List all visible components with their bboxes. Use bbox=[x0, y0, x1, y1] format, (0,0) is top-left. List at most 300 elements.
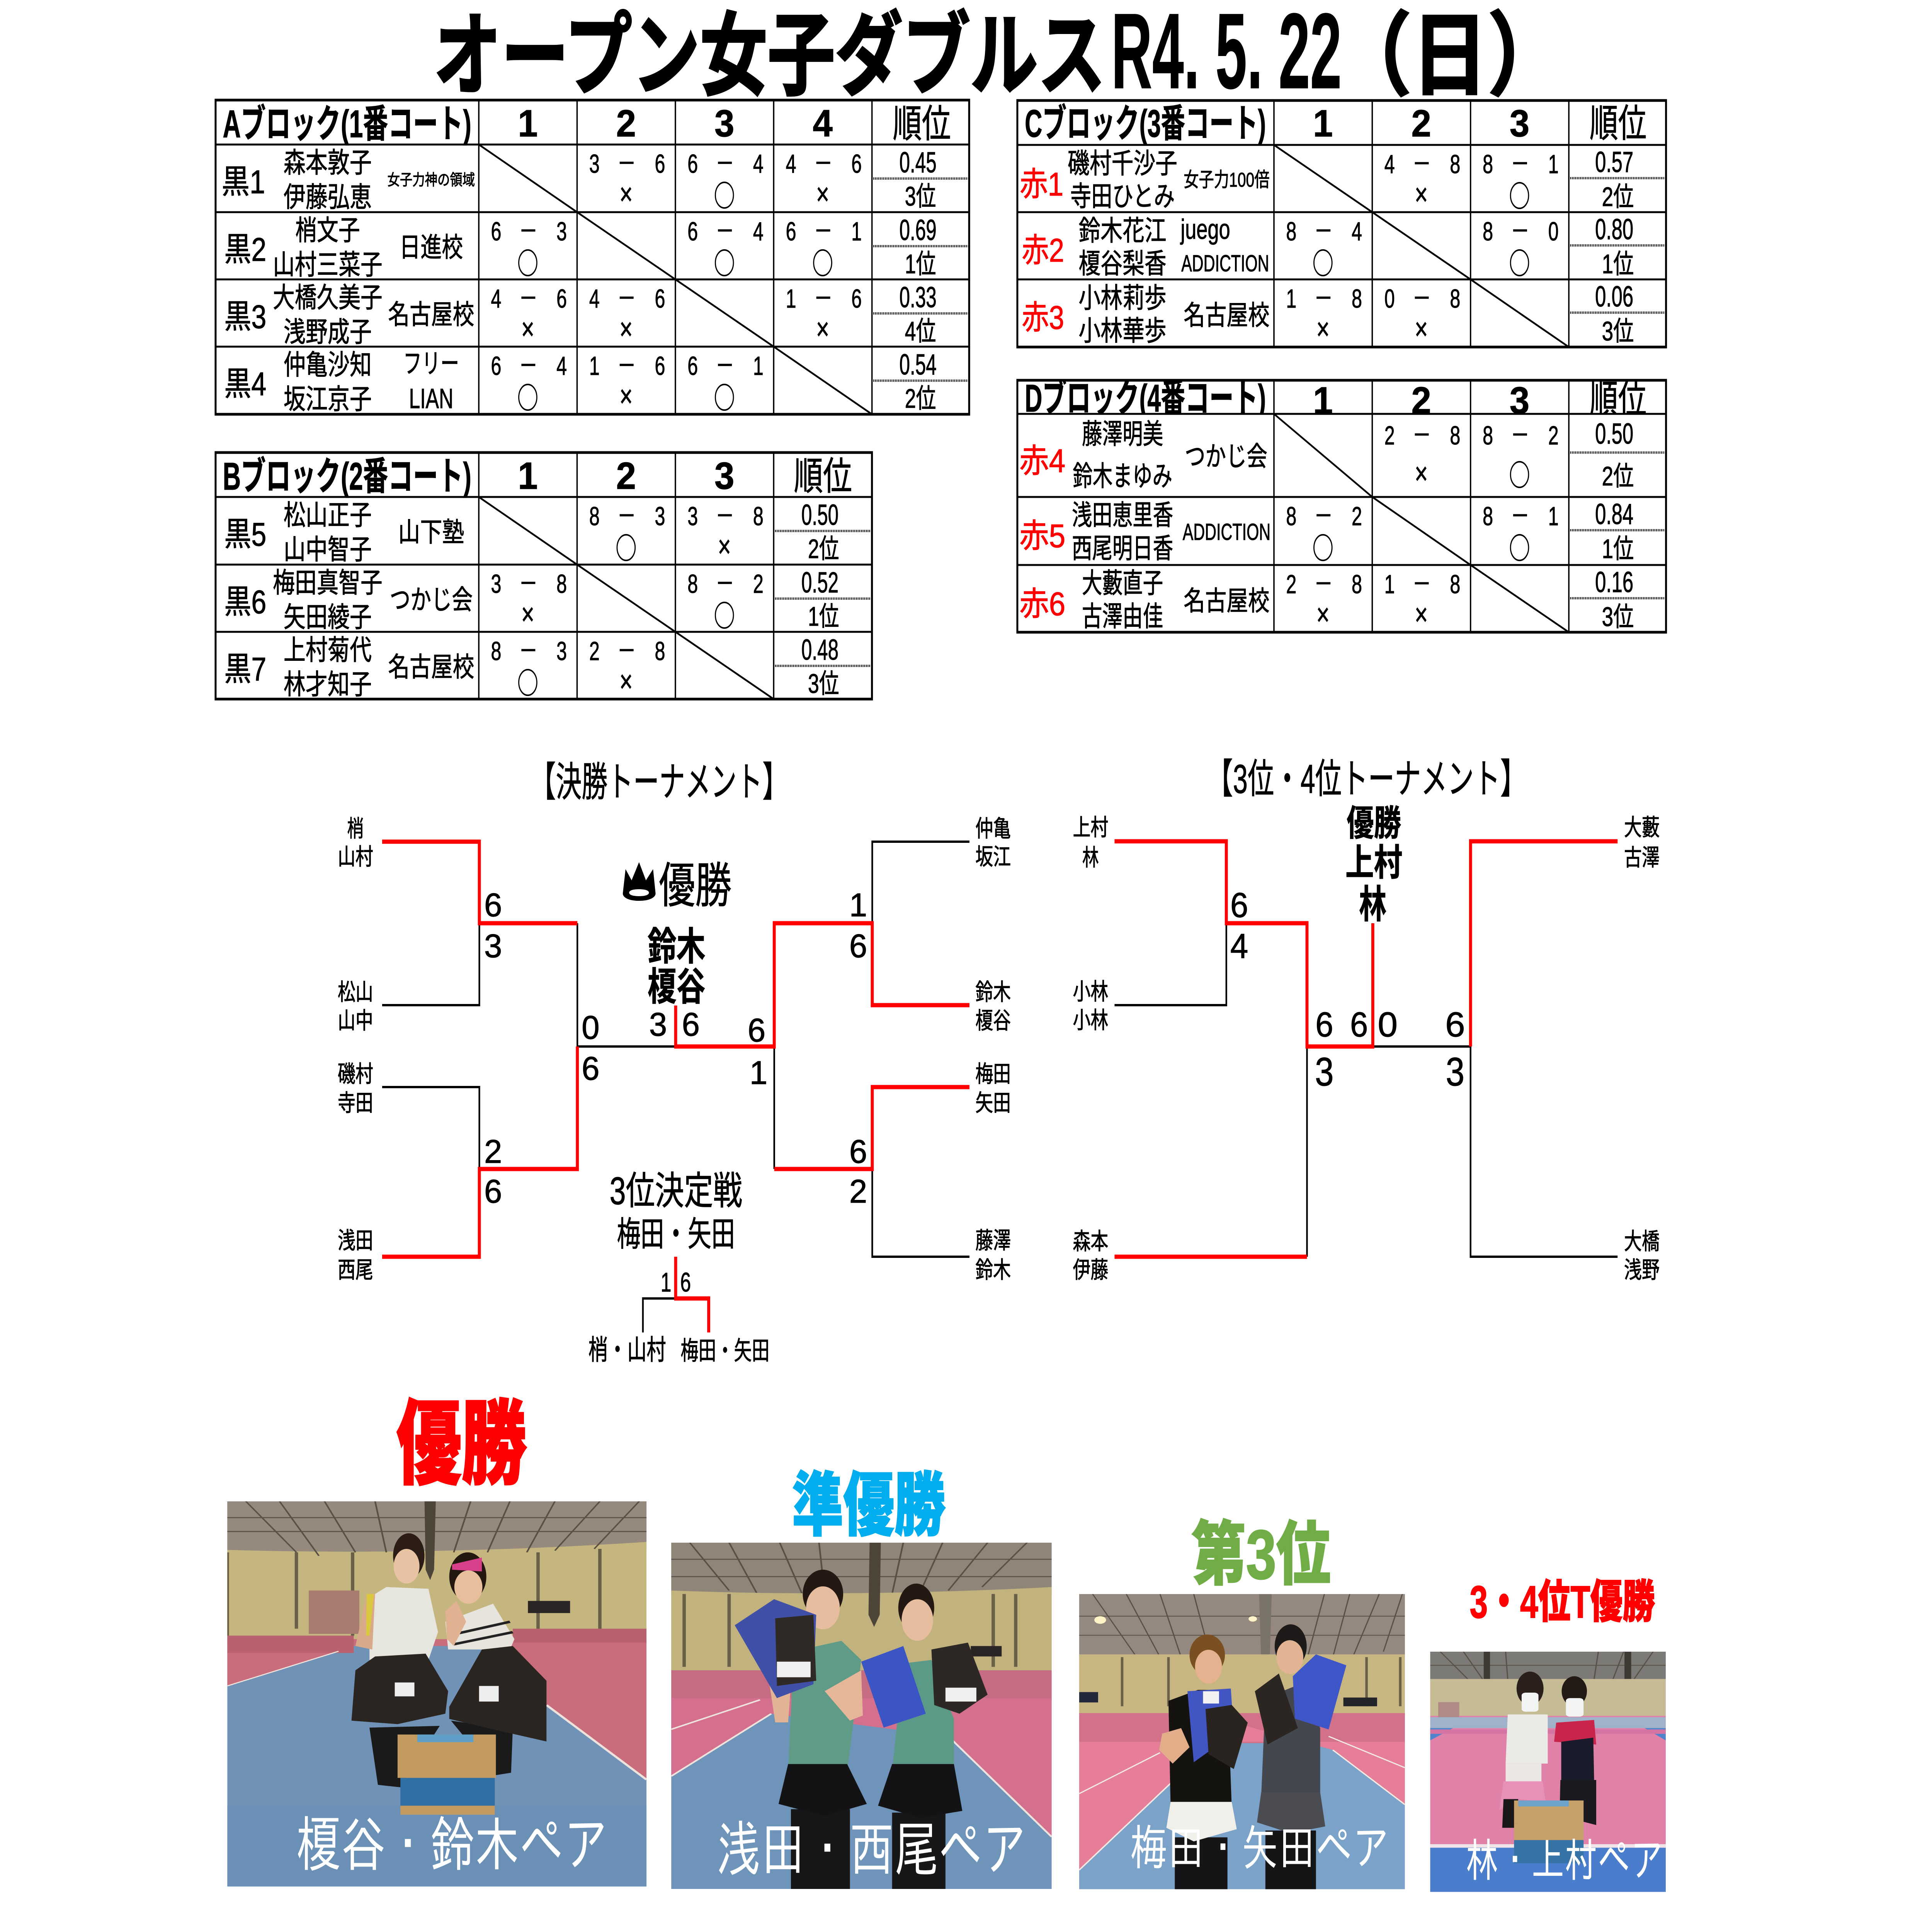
row: 黒6: 3 bbox=[491, 569, 502, 599]
third place match scores and teams: 1 bbox=[661, 1267, 672, 1297]
panel: final tournament bracket bbox=[338, 760, 1011, 1366]
row: 赤3: × bbox=[1316, 311, 1330, 347]
row: 赤4: ○ bbox=[1509, 452, 1530, 495]
bracket scores: 3rd/4th: 3 bbox=[1446, 1050, 1464, 1094]
row: 黒2: 0.69 bbox=[900, 214, 937, 246]
player names: right side: 大橋 bbox=[1624, 1229, 1660, 1255]
row: 黒3: － bbox=[617, 284, 636, 313]
row: 赤4: 鈴木まゆみ bbox=[1073, 461, 1172, 492]
row: 黒1 bbox=[222, 146, 968, 215]
row: 赤3: 1 bbox=[1286, 284, 1296, 313]
player names: right side: 坂江 bbox=[975, 844, 1011, 870]
row: 赤5: 赤5 bbox=[1019, 517, 1065, 554]
row: 赤6 bbox=[1019, 566, 1665, 632]
row: 赤2: 0.80 bbox=[1595, 213, 1633, 245]
bracket scores: 3rd/4th: 6 bbox=[1350, 1005, 1368, 1044]
block D header: 順位 bbox=[1590, 378, 1646, 421]
row: 赤4: 2 bbox=[1548, 421, 1559, 450]
row: 黒4: 2位 bbox=[905, 383, 936, 413]
row: 黒4: 仲亀沙知 bbox=[284, 350, 372, 381]
row: 赤3: － bbox=[1412, 284, 1431, 313]
row: 黒1: 6 bbox=[687, 149, 698, 179]
row: 赤5: 0.84 bbox=[1595, 498, 1633, 530]
row: 黒2: 日進校 bbox=[400, 232, 463, 262]
panel: 3rd/4th place tournament bracket bbox=[1073, 757, 1660, 1283]
row: 黒1: － bbox=[814, 149, 833, 179]
bracket scores: final: 2 bbox=[484, 1133, 502, 1170]
row: 黒4: 1 bbox=[753, 351, 764, 381]
row: 赤6: × bbox=[1415, 597, 1428, 632]
row: 黒2: ○ bbox=[517, 240, 538, 283]
block A header: Aブロック(1番コート) bbox=[223, 102, 471, 146]
champion label and names: 林 bbox=[1359, 883, 1386, 926]
row: 黒3: 4 bbox=[491, 284, 502, 313]
player names: right side: 鈴木 bbox=[975, 1257, 1011, 1283]
player names: left side: 森本 bbox=[1073, 1229, 1108, 1255]
row: 黒4: 4 bbox=[556, 351, 567, 381]
row: 黒1: 6 bbox=[851, 149, 862, 179]
player names: right side bbox=[1624, 815, 1660, 1283]
row: 黒5: × bbox=[718, 529, 731, 564]
row: 赤6: 古澤由佳 bbox=[1082, 601, 1163, 632]
row: 黒1: 3 bbox=[589, 149, 600, 179]
row: 黒5: 2位 bbox=[808, 534, 839, 564]
row: 黒2: 4 bbox=[753, 217, 764, 246]
row: 赤6: × bbox=[1316, 597, 1330, 632]
row: 赤1: 8 bbox=[1450, 150, 1460, 179]
row: 黒1: × bbox=[619, 177, 633, 212]
row: 黒3: 大橋久美子 bbox=[273, 282, 383, 313]
row: 赤6: 赤6 bbox=[1019, 585, 1065, 622]
row: 赤1: × bbox=[1415, 177, 1428, 212]
bracket scores: 3rd/4th: 6 bbox=[1230, 885, 1248, 925]
bracket scores: 3rd/4th: 6 bbox=[1445, 1005, 1465, 1044]
row: 黒5: － bbox=[617, 502, 636, 531]
bracket scores: final: 6 bbox=[682, 1006, 700, 1043]
row: 黒2 bbox=[224, 214, 968, 283]
block B header: 3 bbox=[714, 455, 734, 497]
row: 黒6: つかじ会 bbox=[390, 585, 473, 615]
row: 赤2: 8 bbox=[1483, 217, 1493, 246]
row: 黒1: 4 bbox=[753, 149, 764, 179]
row: 黒2: ○ bbox=[714, 240, 735, 283]
row: 黒1: 女子力神の領域 bbox=[388, 171, 475, 189]
block B header: 順位 bbox=[794, 455, 852, 498]
row: 赤3: 小林華歩 bbox=[1078, 316, 1167, 347]
row: 黒3: － bbox=[814, 284, 833, 313]
row: 赤4: － bbox=[1412, 421, 1431, 450]
block B header: 1 bbox=[518, 455, 538, 497]
row: 赤6: 8 bbox=[1352, 570, 1362, 599]
player names: left side: 松山 bbox=[338, 980, 373, 1006]
player names: left side bbox=[338, 816, 373, 1283]
row: 黒4: 6 bbox=[687, 351, 698, 381]
title: （日） bbox=[1336, 5, 1564, 107]
heading: winner: 優勝 bbox=[396, 1393, 527, 1496]
player names: right side: 矢田 bbox=[975, 1091, 1011, 1116]
row: 黒2: 1 bbox=[851, 217, 862, 246]
row: 黒4: ○ bbox=[714, 374, 735, 417]
block C header: Cブロック(3番コート) bbox=[1025, 102, 1266, 145]
row: 赤2: juego bbox=[1180, 214, 1230, 245]
row: 黒5: 松山正子 bbox=[284, 500, 372, 531]
row: 赤1: 磯村千沙子 bbox=[1068, 148, 1177, 179]
champion names: 鈴木 bbox=[648, 925, 706, 968]
row: 赤3: 小林莉歩 bbox=[1078, 283, 1167, 314]
row: 黒3: 名古屋校 bbox=[388, 299, 474, 330]
block D header: 2 bbox=[1412, 379, 1431, 422]
row: 赤4: つかじ会 bbox=[1185, 441, 1267, 471]
row: 黒6: 0.52 bbox=[801, 566, 838, 599]
row: 赤1: － bbox=[1412, 150, 1431, 179]
row: 黒1: 3位 bbox=[905, 181, 936, 211]
row: 黒4: － bbox=[617, 351, 636, 381]
heading: 3rd/4th tournament winner: 3・4位T優勝 bbox=[1470, 1576, 1655, 1627]
row: 黒1: 森本敦子 bbox=[284, 148, 372, 179]
player names: left side: 林 bbox=[1082, 845, 1099, 871]
block A header: 4 bbox=[813, 102, 833, 145]
row: 黒5: 8 bbox=[753, 502, 764, 531]
row: 黒7: 8 bbox=[655, 636, 665, 666]
row: 黒5: 3 bbox=[655, 502, 665, 531]
row: 黒1: － bbox=[716, 149, 734, 179]
player names: right side: 藤澤 bbox=[975, 1228, 1011, 1254]
row: 赤2: － bbox=[1511, 217, 1529, 246]
row: 赤2 bbox=[1022, 213, 1665, 283]
row: 赤3: 0 bbox=[1384, 284, 1395, 313]
champion label and names: 上村 bbox=[1345, 842, 1402, 883]
block B header bbox=[223, 455, 852, 498]
bracket scores: final: 1 bbox=[750, 1054, 767, 1091]
player names: right side: 梅田 bbox=[975, 1062, 1011, 1087]
row: 赤4: 2位 bbox=[1602, 461, 1634, 491]
row: 赤6: － bbox=[1412, 570, 1431, 599]
champion label and names bbox=[1345, 803, 1402, 926]
row: 赤3 bbox=[1022, 280, 1665, 347]
row: 黒7: 3 bbox=[556, 636, 567, 666]
bracket scores: final: 6 bbox=[582, 1050, 600, 1087]
row: 黒6: － bbox=[519, 569, 538, 599]
photo panel: 3rd/4th tournament winners bbox=[1430, 1652, 1666, 1892]
block D header: 1 bbox=[1313, 379, 1333, 422]
row: 赤3: × bbox=[1415, 311, 1428, 347]
row: 黒5: 0.50 bbox=[801, 499, 838, 531]
row: 黒6 bbox=[224, 566, 871, 635]
row: 黒5: ○ bbox=[616, 525, 636, 568]
row: 黒4: 1 bbox=[589, 351, 600, 381]
bracket lines: 3rd/4th bbox=[1114, 841, 1617, 1257]
row: 黒6: 黒6 bbox=[224, 584, 266, 620]
player names: right side: 大藪 bbox=[1624, 815, 1660, 841]
caption: 3rd/4th tournament winners: 林・上村ペア bbox=[1466, 1836, 1663, 1882]
heading: runner-up: 準優勝 bbox=[792, 1467, 946, 1545]
row: 赤1: 2位 bbox=[1602, 182, 1634, 212]
row: 黒7: 0.48 bbox=[801, 633, 838, 666]
row: 黒5 bbox=[224, 499, 871, 568]
bracket scores: final bbox=[484, 887, 867, 1210]
block C header: 2 bbox=[1412, 102, 1431, 145]
row: 黒1: ○ bbox=[714, 172, 735, 215]
player names: left side: 梢 bbox=[347, 816, 364, 842]
row: 黒4: フリー bbox=[403, 349, 459, 379]
row: 赤6: 名古屋校 bbox=[1184, 586, 1270, 616]
row: 赤1: 1 bbox=[1548, 150, 1559, 179]
player names: right side: 榎谷 bbox=[975, 1008, 1011, 1034]
bracket scores: final: 6 bbox=[484, 1173, 502, 1210]
row: 赤3: 0.06 bbox=[1595, 280, 1633, 313]
block D header: Dブロック(4番コート) bbox=[1025, 377, 1266, 420]
row: 黒3: × bbox=[816, 311, 829, 347]
row: 赤4 bbox=[1019, 417, 1665, 495]
row: 赤2: ADDICTION bbox=[1181, 251, 1269, 277]
row: 黒6: － bbox=[716, 569, 734, 599]
row: 赤5: 1位 bbox=[1602, 534, 1634, 564]
panel: block C table bbox=[1017, 100, 1666, 347]
row: 赤4: 0.50 bbox=[1595, 417, 1633, 450]
bracket scores: final: 3 bbox=[649, 1006, 667, 1043]
row: 赤1: 0.57 bbox=[1595, 146, 1633, 178]
row: 黒3: × bbox=[619, 311, 633, 347]
player names: right side: 古澤 bbox=[1624, 845, 1660, 871]
row: 黒6: 矢田綾子 bbox=[284, 602, 372, 633]
row: 黒3: 6 bbox=[851, 284, 862, 313]
block B header: Bブロック(2番コート) bbox=[223, 455, 471, 498]
row: 赤5: ○ bbox=[1313, 525, 1333, 568]
row: 黒7: － bbox=[519, 636, 538, 666]
player names: left side: 山村 bbox=[338, 844, 373, 870]
row: 黒7: 名古屋校 bbox=[388, 652, 474, 682]
bracket scores: final: 6 bbox=[484, 887, 502, 923]
player names: left side: 伊藤 bbox=[1073, 1257, 1108, 1283]
row: 黒2: 3 bbox=[556, 217, 567, 246]
row: 赤4: 8 bbox=[1450, 421, 1460, 450]
third place match label: 梅田・矢田 bbox=[617, 1216, 735, 1254]
row: 赤2: － bbox=[1314, 217, 1333, 246]
row: 黒3 bbox=[224, 281, 968, 348]
row: 黒4: － bbox=[519, 351, 538, 381]
caption: runners-up: 浅田・西尾ペア bbox=[716, 1818, 1027, 1878]
bracket scores: final: 6 bbox=[748, 1012, 765, 1048]
row: 黒1: × bbox=[816, 177, 829, 212]
block C header: 3 bbox=[1510, 102, 1529, 145]
row: 黒6: ○ bbox=[714, 592, 735, 635]
row: 黒4: × bbox=[619, 379, 633, 414]
panel: block B table bbox=[216, 453, 872, 703]
bracket scores: 3rd/4th: 6 bbox=[1315, 1005, 1333, 1044]
third place match scores and teams bbox=[588, 1267, 770, 1366]
row: 黒1: 伊藤弘恵 bbox=[284, 182, 372, 213]
row: 赤3: 名古屋校 bbox=[1184, 300, 1270, 330]
bracket scores: final: 6 bbox=[849, 927, 867, 964]
bracket scores: 3rd/4th: 4 bbox=[1230, 926, 1248, 966]
player names: left side: 西尾 bbox=[338, 1257, 373, 1283]
row: 黒1: 4 bbox=[786, 149, 796, 179]
row: 黒4 bbox=[224, 348, 968, 417]
row: 黒7: 8 bbox=[491, 636, 502, 666]
player names: left side bbox=[1073, 815, 1108, 1283]
row: 黒4: LIAN bbox=[409, 383, 453, 414]
block A header: 2 bbox=[616, 102, 636, 145]
row: 黒2: 6 bbox=[687, 217, 698, 246]
row: 黒2: 山村三菜子 bbox=[273, 250, 383, 281]
row: 黒1: 黒1 bbox=[222, 163, 265, 200]
row: 黒4: － bbox=[716, 351, 734, 381]
row: 黒4: 黒4 bbox=[224, 366, 266, 402]
row: 黒7: × bbox=[619, 664, 633, 699]
row: 赤3: － bbox=[1314, 284, 1333, 313]
block D header bbox=[1025, 377, 1646, 422]
row: 赤5: 西尾明日香 bbox=[1072, 533, 1173, 564]
row: 赤5: 浅田恵里香 bbox=[1072, 500, 1173, 531]
photo panel: winners bbox=[227, 1501, 646, 1887]
block A header: 3 bbox=[714, 102, 734, 145]
third place match label bbox=[610, 1169, 742, 1254]
icon: crown bbox=[623, 862, 656, 901]
row: 黒5: 山中智子 bbox=[284, 534, 372, 565]
row: 黒6: 梅田真智子 bbox=[273, 568, 383, 599]
row: 赤3: 3位 bbox=[1602, 316, 1634, 346]
block A header: 1 bbox=[518, 102, 538, 145]
champion label: 優勝 bbox=[659, 859, 731, 912]
row: 赤5: － bbox=[1314, 502, 1333, 531]
row: 黒2: － bbox=[716, 217, 734, 246]
third place match label: 3位決定戦 bbox=[610, 1169, 742, 1213]
bracket scores: 3rd/4th: 0 bbox=[1378, 1005, 1398, 1044]
row: 赤5: ○ bbox=[1509, 525, 1530, 568]
row: 赤4: 赤4 bbox=[1019, 442, 1065, 479]
row: 黒2: 梢文子 bbox=[295, 215, 360, 246]
panel: block A table bbox=[216, 100, 969, 417]
row: 黒4: 6 bbox=[655, 351, 665, 381]
row: 黒2: ○ bbox=[812, 240, 833, 283]
block D header: 3 bbox=[1510, 379, 1529, 422]
row: 黒2: 黒2 bbox=[224, 231, 266, 268]
bracket lines: final bbox=[382, 842, 969, 1332]
row: 赤4: － bbox=[1511, 421, 1529, 450]
row: 赤2: 0 bbox=[1548, 217, 1559, 246]
row: 黒5: 黒5 bbox=[224, 516, 266, 553]
row: 黒4: 6 bbox=[491, 351, 502, 381]
row: 赤2: 鈴木花江 bbox=[1078, 216, 1167, 247]
row: 黒6: 1位 bbox=[808, 601, 839, 631]
champion names bbox=[648, 925, 706, 1009]
row: 赤3: 赤3 bbox=[1022, 299, 1064, 336]
bracket scores: final: 3 bbox=[484, 927, 502, 964]
row: 赤2: 4 bbox=[1352, 217, 1362, 246]
row: 赤1: 赤1 bbox=[1020, 166, 1063, 202]
row: 赤5: ADDICTION bbox=[1183, 519, 1270, 545]
row: 赤1: 4 bbox=[1384, 150, 1395, 179]
player names: right side: 鈴木 bbox=[975, 980, 1011, 1006]
row: 黒5: 8 bbox=[589, 502, 600, 531]
row: 赤5: 8 bbox=[1483, 502, 1493, 531]
bracket scores: final: 6 bbox=[849, 1133, 867, 1170]
row: 黒7: ○ bbox=[517, 660, 538, 703]
champion label and names: 優勝 bbox=[1347, 803, 1401, 843]
row: 黒2: 1位 bbox=[905, 249, 936, 279]
row: 赤6: 2 bbox=[1286, 570, 1296, 599]
player names: left side: 小林 bbox=[1073, 1008, 1108, 1034]
row: 赤2: ○ bbox=[1509, 240, 1530, 283]
bracket scores: 3rd/4th bbox=[1230, 885, 1465, 1094]
third place match scores and teams: 6 bbox=[680, 1267, 691, 1297]
row: 赤5: － bbox=[1511, 502, 1529, 531]
row: 赤1: 女子力100倍 bbox=[1184, 168, 1270, 191]
row: 赤4: 2 bbox=[1384, 421, 1395, 450]
champion names: 榎谷 bbox=[648, 965, 706, 1009]
row: 黒4: 坂江京子 bbox=[284, 384, 372, 415]
row: 赤3: 8 bbox=[1352, 284, 1362, 313]
row: 黒3: 6 bbox=[655, 284, 665, 313]
title bbox=[434, 0, 1564, 111]
row: 黒3: 4位 bbox=[905, 316, 936, 346]
block A header bbox=[223, 102, 951, 146]
row: 黒4: 0.54 bbox=[900, 348, 937, 381]
row: 赤2: 赤2 bbox=[1022, 232, 1064, 269]
row: 赤1: 寺田ひとみ bbox=[1070, 181, 1175, 212]
block B header: 2 bbox=[616, 455, 636, 497]
row: 黒5: － bbox=[716, 502, 734, 531]
player names: left side: 山中 bbox=[338, 1008, 373, 1034]
row: 黒3: × bbox=[521, 311, 534, 347]
player names: left side: 浅田 bbox=[338, 1228, 373, 1254]
block C header: 1 bbox=[1313, 102, 1333, 145]
row: 黒1: 6 bbox=[655, 149, 665, 179]
row: 黒3: 浅野成子 bbox=[284, 317, 372, 348]
row: 赤4: × bbox=[1415, 456, 1428, 491]
row: 赤2: 榎谷梨香 bbox=[1078, 248, 1167, 279]
row: 赤1 bbox=[1020, 146, 1665, 216]
row: 赤4: 藤澤明美 bbox=[1082, 419, 1163, 450]
row: 赤6: 大藪直子 bbox=[1082, 568, 1163, 599]
row: 赤2: 8 bbox=[1286, 217, 1296, 246]
row: 赤2: 1位 bbox=[1602, 249, 1634, 279]
block A header: 順位 bbox=[893, 102, 951, 146]
bracket scores: final: 2 bbox=[849, 1173, 867, 1210]
heading: 3rd/4th tournament: 【3位・4位トーナメント】 bbox=[1206, 757, 1527, 802]
player names: right side bbox=[975, 816, 1011, 1283]
row: 赤6: 3位 bbox=[1602, 602, 1634, 632]
row: 赤5 bbox=[1019, 498, 1665, 568]
row: 赤3: 8 bbox=[1450, 284, 1460, 313]
row: 黒3: － bbox=[519, 284, 538, 313]
row: 黒2: － bbox=[814, 217, 833, 246]
row: 黒1: － bbox=[617, 149, 636, 179]
row: 黒7: 上村菊代 bbox=[284, 635, 372, 666]
block C header bbox=[1025, 102, 1646, 145]
row: 黒7 bbox=[224, 633, 871, 703]
row: 黒2: 6 bbox=[491, 217, 502, 246]
row: 赤1: － bbox=[1511, 150, 1529, 179]
bracket scores: final: 0 bbox=[582, 1009, 600, 1046]
caption: winners: 榎谷・鈴木ペア bbox=[296, 1814, 608, 1873]
row: 赤4: 8 bbox=[1483, 421, 1493, 450]
row: 赤5: 1 bbox=[1548, 502, 1559, 531]
row: 赤6: － bbox=[1314, 570, 1333, 599]
row: 黒3: 6 bbox=[556, 284, 567, 313]
row: 黒7: 黒7 bbox=[224, 651, 266, 687]
row: 赤6: 8 bbox=[1450, 570, 1460, 599]
row: 赤1: ○ bbox=[1509, 173, 1530, 216]
row: 黒6: 2 bbox=[753, 569, 764, 599]
row: 黒7: 2 bbox=[589, 636, 600, 666]
row: 赤1: 8 bbox=[1483, 150, 1493, 179]
row: 赤5: 8 bbox=[1286, 502, 1296, 531]
row: 黒7: － bbox=[617, 636, 636, 666]
block C header: 順位 bbox=[1590, 102, 1646, 145]
third place match scores and teams: 梢・山村 bbox=[588, 1335, 666, 1366]
photo panel: runners-up bbox=[671, 1543, 1052, 1889]
